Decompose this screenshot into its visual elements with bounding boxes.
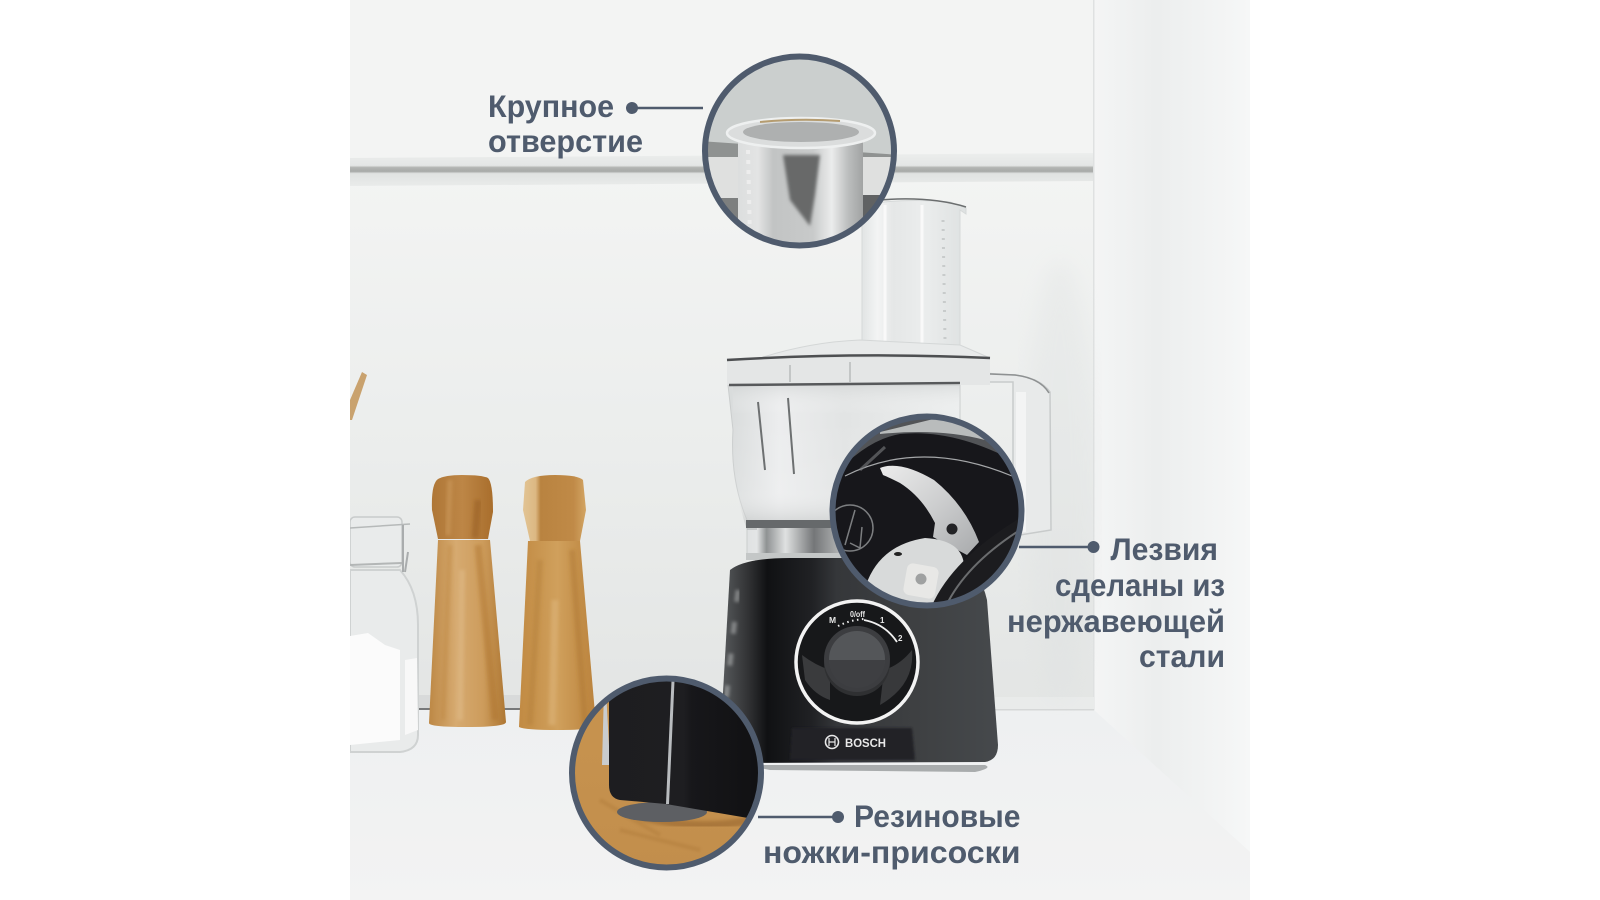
callout label: large opening: Крупное <box>488 88 614 124</box>
bowl <box>728 385 960 557</box>
callout label: rubber suction feet: Резиновые <box>854 798 1020 834</box>
handle <box>962 372 1051 535</box>
motor base <box>720 558 998 763</box>
food processor <box>720 199 1051 772</box>
pepper mill left <box>429 475 506 727</box>
callout label: rubber suction feet <box>758 798 1020 870</box>
lid <box>760 340 990 358</box>
dial: 2 <box>898 634 903 643</box>
infographic: food processor photo with callouts <box>350 0 1250 900</box>
dial: 0/off <box>850 610 865 619</box>
callout label: large opening <box>488 88 703 159</box>
callout label: stainless steel blades <box>1007 531 1225 674</box>
pepper mill right <box>519 475 596 730</box>
dial <box>796 601 918 723</box>
callout label: stainless steel blades: Лезвия <box>1110 531 1218 567</box>
callout label: stainless steel blades: сделаны из <box>1055 567 1225 603</box>
dial: 1 <box>880 616 885 625</box>
brand logo: BOSCH <box>845 736 886 750</box>
feed tube <box>862 199 966 350</box>
photo background: kitchen niche <box>350 0 1250 900</box>
callout label: stainless steel blades: нержавеющей <box>1007 603 1225 639</box>
glass jar with flour <box>350 517 418 752</box>
callout 3 zoom: rubber suction foot <box>569 676 764 870</box>
callout 1 zoom: feed tube opening <box>700 50 900 251</box>
callout label: large opening: отверстие <box>488 123 643 159</box>
callout 2 zoom: stainless blade <box>827 410 1030 615</box>
dial: M <box>829 615 836 625</box>
callout label: stainless steel blades: стали <box>1139 638 1225 674</box>
wooden sticks <box>350 372 367 420</box>
brand logo <box>826 736 886 750</box>
callout label: rubber suction feet: ножки-присоски <box>763 834 1020 870</box>
